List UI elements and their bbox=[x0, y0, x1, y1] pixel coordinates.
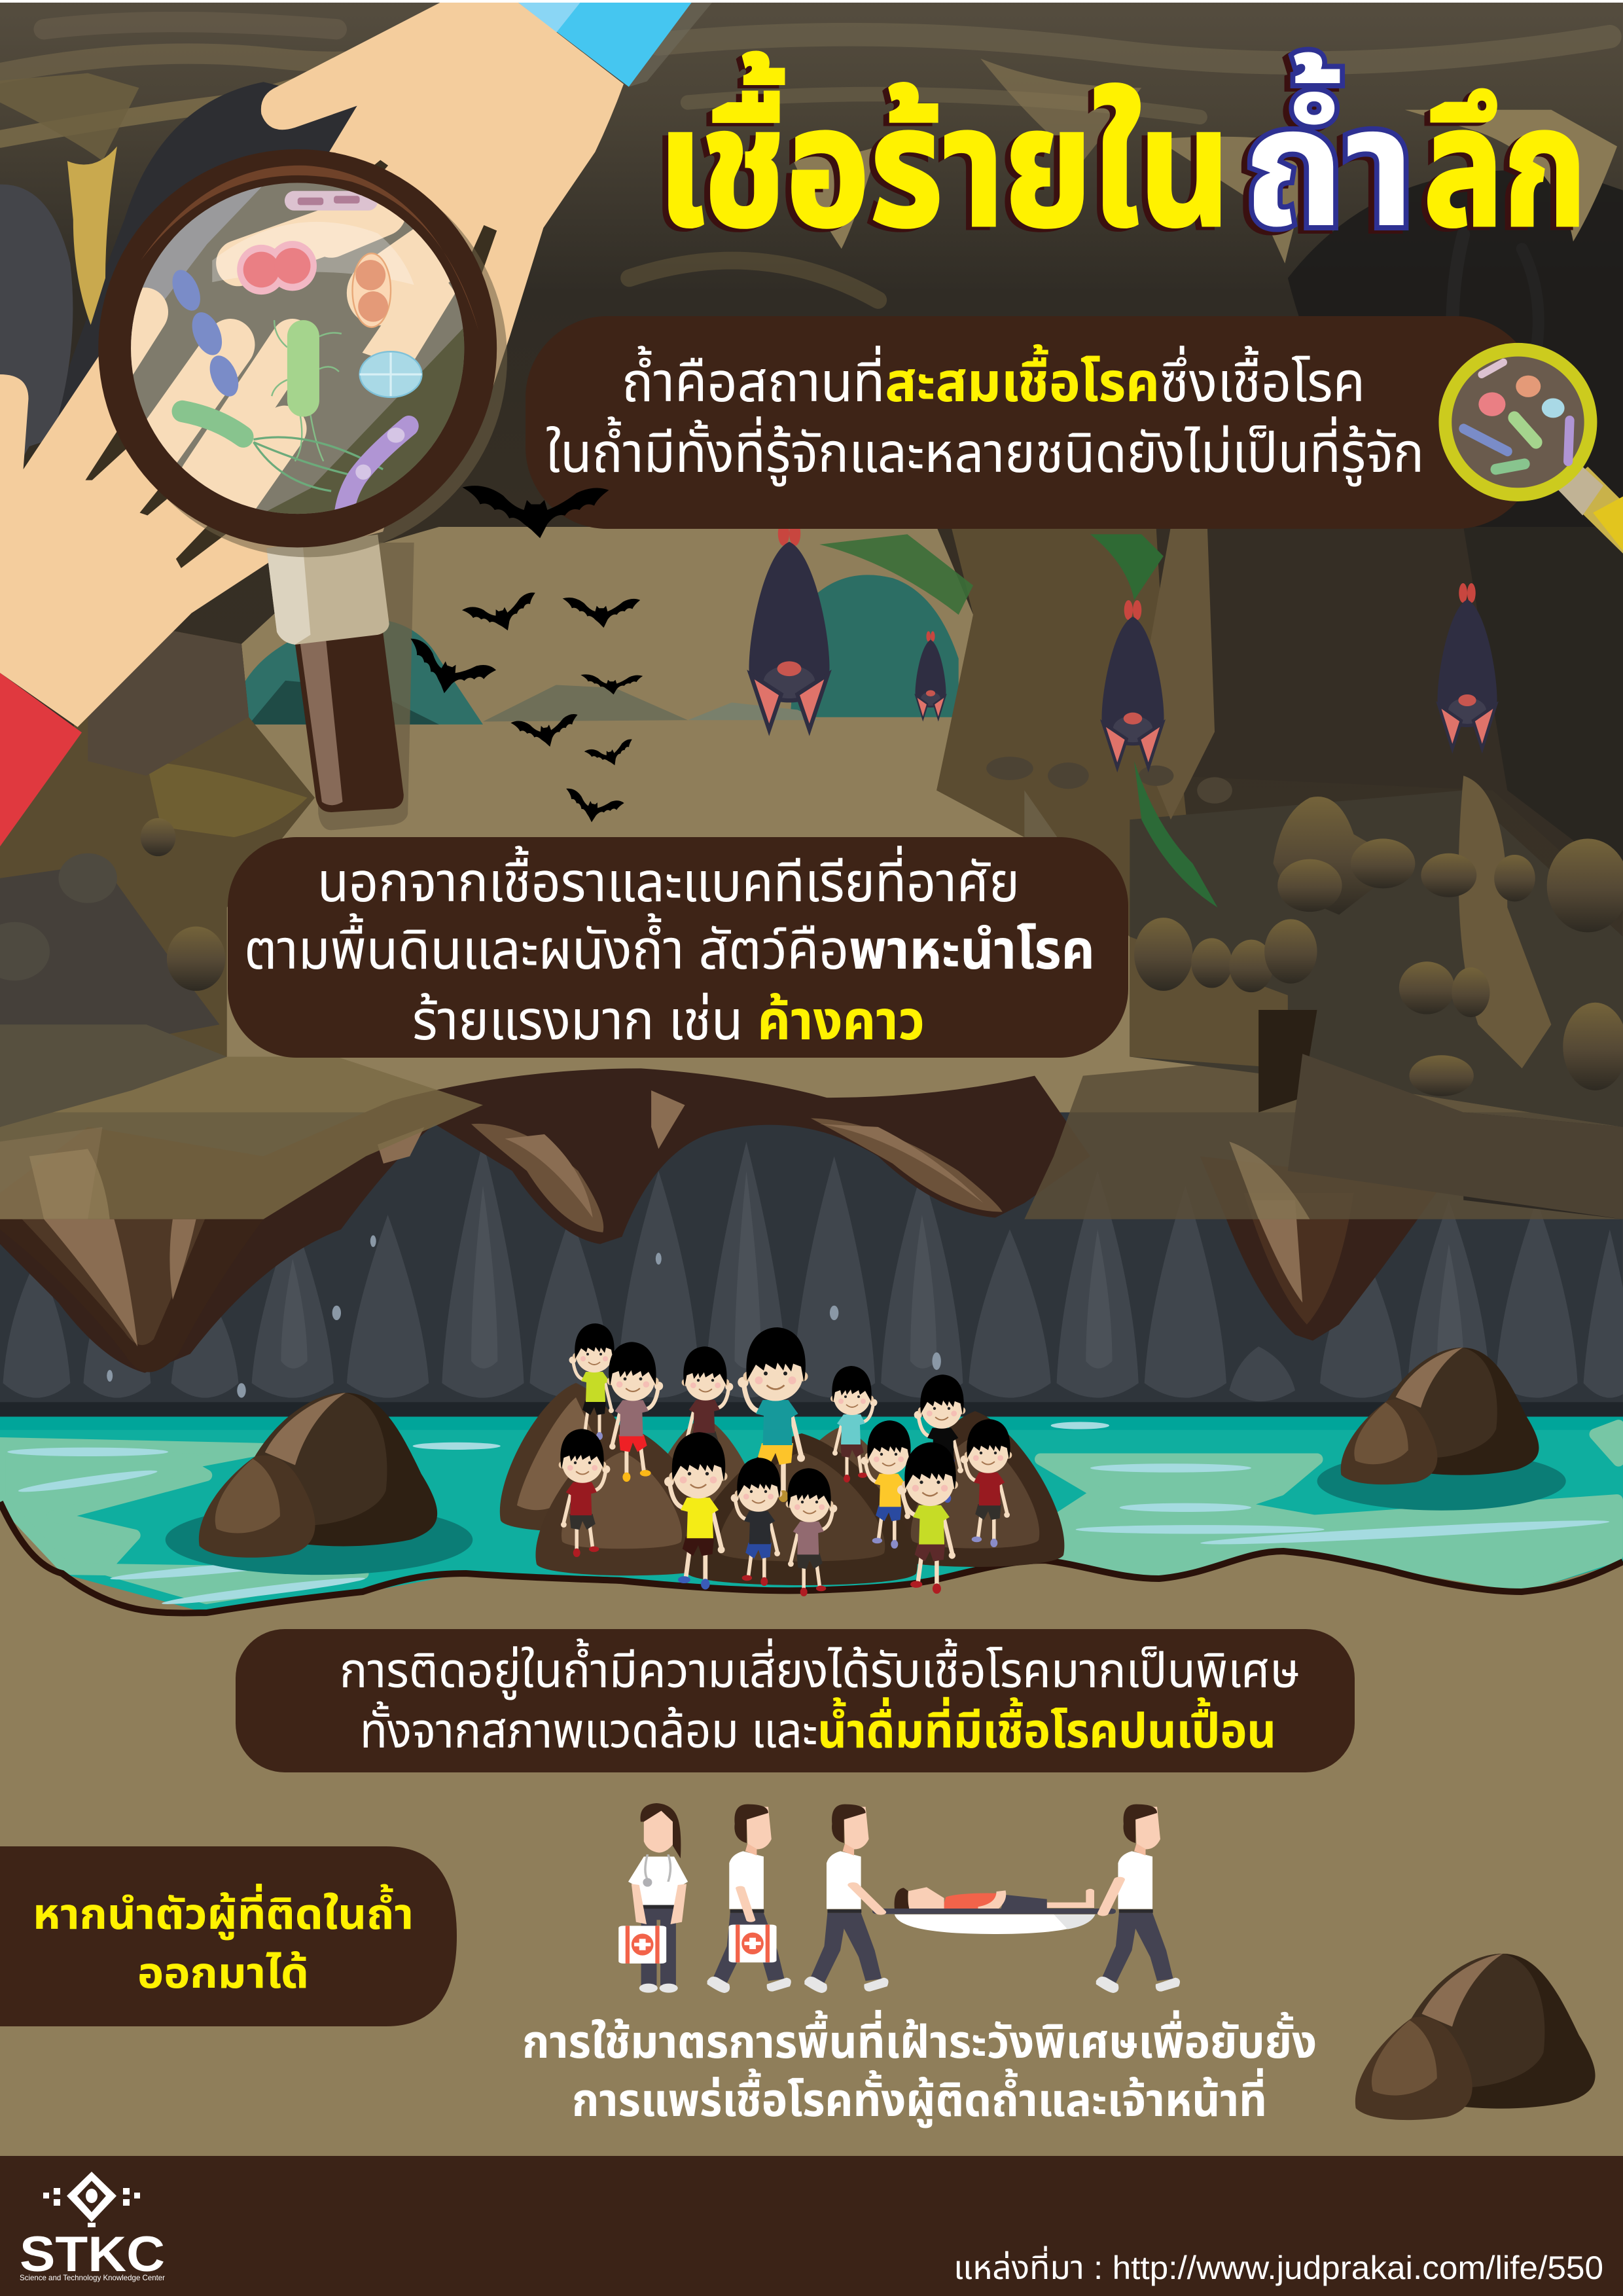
shore line bbox=[0, 1502, 1623, 1613]
blue quarter cell microbe bbox=[360, 351, 422, 397]
orange double cell microbe bbox=[353, 253, 391, 327]
source credit: แหล่งที่มา : http://www.judprakai.com/life/550 bbox=[954, 2246, 1603, 2286]
cave ceiling and walls bbox=[0, 0, 1623, 1127]
title word yellow end: ลึก bbox=[1423, 75, 1587, 261]
footer bar bbox=[0, 2156, 1623, 2296]
dark left rock and gold vein bbox=[0, 73, 439, 497]
bat bbox=[561, 788, 624, 829]
icon: emblem bbox=[43, 2172, 140, 2227]
purple rod microbe bbox=[344, 426, 409, 512]
stretcher bearer front bbox=[804, 1804, 889, 1993]
child teal shirt bbox=[738, 1327, 808, 1502]
hanging bat large bbox=[749, 521, 830, 730]
title words yellow: เชื้อร้ายใน bbox=[658, 52, 1230, 261]
child red shirt left bbox=[559, 1429, 610, 1557]
hanging bat right bbox=[1437, 583, 1497, 749]
bearer arm bbox=[853, 1885, 881, 1912]
text: containment measures: การใช้มาตรการพื้นที่เฝ้าระวังพิเศษเพื่อยับยั้ง bbox=[522, 2010, 1317, 2068]
right wall bbox=[819, 527, 1623, 1219]
panel: cave is a reservoir of pathogens bbox=[526, 316, 1538, 529]
blue chain microbe bbox=[173, 270, 238, 397]
lower grey cave wall with flutes bbox=[0, 1113, 1623, 1417]
stretcher bearer back bbox=[1096, 1804, 1180, 1993]
rock shadows bbox=[166, 1452, 1566, 1575]
bearer arm back bbox=[1103, 1880, 1120, 1913]
child mauve shirt bbox=[786, 1468, 837, 1596]
left stalactite bbox=[0, 1219, 264, 1372]
magnifier handle bbox=[266, 535, 404, 812]
child dark shirt blue shorts bbox=[731, 1458, 782, 1586]
stretcher with patient bbox=[872, 1887, 1116, 1934]
text line 2: ตามพื้นดินและผนังถ้ำ สัตว์คือพาหะนำโรค bbox=[244, 913, 1095, 980]
red sleeve bbox=[0, 673, 82, 846]
text line 2: ออกมาได้ bbox=[137, 1948, 309, 1997]
first aid kit bbox=[729, 1925, 777, 1962]
pink dividing microbe bbox=[237, 241, 317, 295]
blue shirt cuff bbox=[515, 0, 714, 87]
panel: animals are disease carriers bbox=[228, 837, 1128, 1058]
translucent rock overlay band bbox=[0, 1057, 1623, 1219]
text line 1: การติดอยู่ในถ้ำมีความเสี่ยงได้รับเชื้อโรคมากเป็นพิเศษ bbox=[340, 1638, 1300, 1700]
green bushes in cave mouth bbox=[234, 575, 959, 725]
bat bbox=[563, 598, 640, 628]
hanging bat small bbox=[915, 631, 946, 719]
bat bbox=[510, 712, 581, 752]
bat bbox=[584, 738, 637, 772]
top edge strip bbox=[0, 0, 1623, 3]
STKC logo bbox=[20, 2172, 165, 2282]
hanging bats bbox=[749, 521, 1497, 767]
text line 1: นอกจากเชื้อราและแบคทีเรียที่อาศัย bbox=[317, 846, 1020, 913]
brown stalactite mass bbox=[0, 1068, 1090, 1373]
rocks under the children bbox=[500, 1383, 1064, 1585]
magnifier rim bbox=[98, 149, 497, 547]
logo tagline: Science and Technology Knowledge Center bbox=[20, 2273, 165, 2282]
text: containment measures: การแพร่เชื้อโรคทั้งผู้ติดถ้ำและเจ้าหน้าที่ bbox=[572, 2068, 1267, 2128]
child light teal shirt bbox=[830, 1366, 877, 1482]
medic woman with stethoscope bbox=[628, 1803, 688, 1993]
trapped children group bbox=[559, 1323, 1012, 1596]
right stalactite bbox=[1200, 1157, 1442, 1340]
text line 3: ร้ายแรงมาก เช่น ค้างคาว bbox=[412, 990, 925, 1051]
finger gaps bbox=[85, 160, 497, 568]
green hairy rod microbe bbox=[272, 320, 342, 461]
bat bbox=[399, 637, 497, 707]
water ripples bbox=[7, 1422, 1610, 1607]
water pool bbox=[0, 1417, 1623, 1613]
text line 2: ทั้งจากสภาพแวดล้อม และน้ำดื่มที่มีเชื้อโรคปนเปื้อน bbox=[360, 1697, 1276, 1758]
bat bbox=[462, 590, 542, 641]
child lime shirt right bbox=[897, 1443, 958, 1594]
child yellow shirt bbox=[664, 1432, 728, 1589]
medic arm bbox=[740, 1888, 751, 1920]
medical team carrying stretcher bbox=[618, 1803, 1180, 1993]
child yellow shirt blue shorts bbox=[861, 1420, 912, 1549]
flying bats bbox=[399, 486, 643, 829]
panel: if the trapped can be brought out bbox=[0, 1846, 457, 2026]
icon: small yellow magnifier with microbes bbox=[1438, 343, 1623, 554]
bat bbox=[580, 674, 643, 694]
cave scene upper walls bbox=[0, 0, 1623, 1417]
title bbox=[658, 52, 1587, 261]
title word highlighted: ถ้ำ bbox=[1243, 52, 1415, 261]
hanging stalactites bbox=[791, 58, 1617, 264]
rock pair left bbox=[199, 1393, 437, 1558]
medic man with kit bbox=[707, 1804, 791, 1993]
text line 2: ในถ้ำมีทั้งที่รู้จักและหลายชนิดยังไม่เป็นที่รู้จัก bbox=[546, 416, 1424, 486]
panel: risk of infection when trapped bbox=[236, 1629, 1355, 1772]
green flagellated rod microbe bbox=[182, 411, 383, 491]
lens shadow bbox=[109, 159, 507, 557]
handle shadow bbox=[310, 543, 414, 830]
text line 1: ถ้ำคือสถานที่สะสมเชื้อโรคซึ่งเชื้อโรค bbox=[622, 344, 1365, 413]
light water patches bbox=[0, 1426, 1618, 1598]
hand bbox=[0, 0, 624, 727]
child mauve shirt red shorts bbox=[607, 1342, 663, 1482]
ceiling rock streaks bbox=[0, 22, 1610, 469]
child dark maroon shirt bbox=[682, 1346, 733, 1475]
lens interior with microbes bbox=[131, 183, 465, 514]
child black shirt bbox=[914, 1374, 965, 1503]
hanging bat on vine bbox=[1102, 600, 1164, 767]
left wall bbox=[0, 615, 315, 1127]
hand with magnifying glass bbox=[0, 0, 714, 846]
first aid kit bbox=[618, 1926, 666, 1964]
black right ceiling hollow bbox=[1288, 170, 1623, 527]
text line 1: หากนำตัวผู้ที่ติดในถ้ำ bbox=[33, 1884, 414, 1940]
logo wordmark: STKC bbox=[20, 2227, 165, 2282]
rock pair right bbox=[1341, 1348, 1539, 1484]
bat large bbox=[463, 486, 609, 538]
child lime shirt bbox=[569, 1323, 616, 1440]
rock pair bottom right bbox=[1355, 1954, 1596, 2120]
text: containment measures bbox=[522, 2010, 1317, 2128]
pink capsule microbe bbox=[285, 191, 378, 211]
child red shirt bbox=[961, 1419, 1012, 1547]
